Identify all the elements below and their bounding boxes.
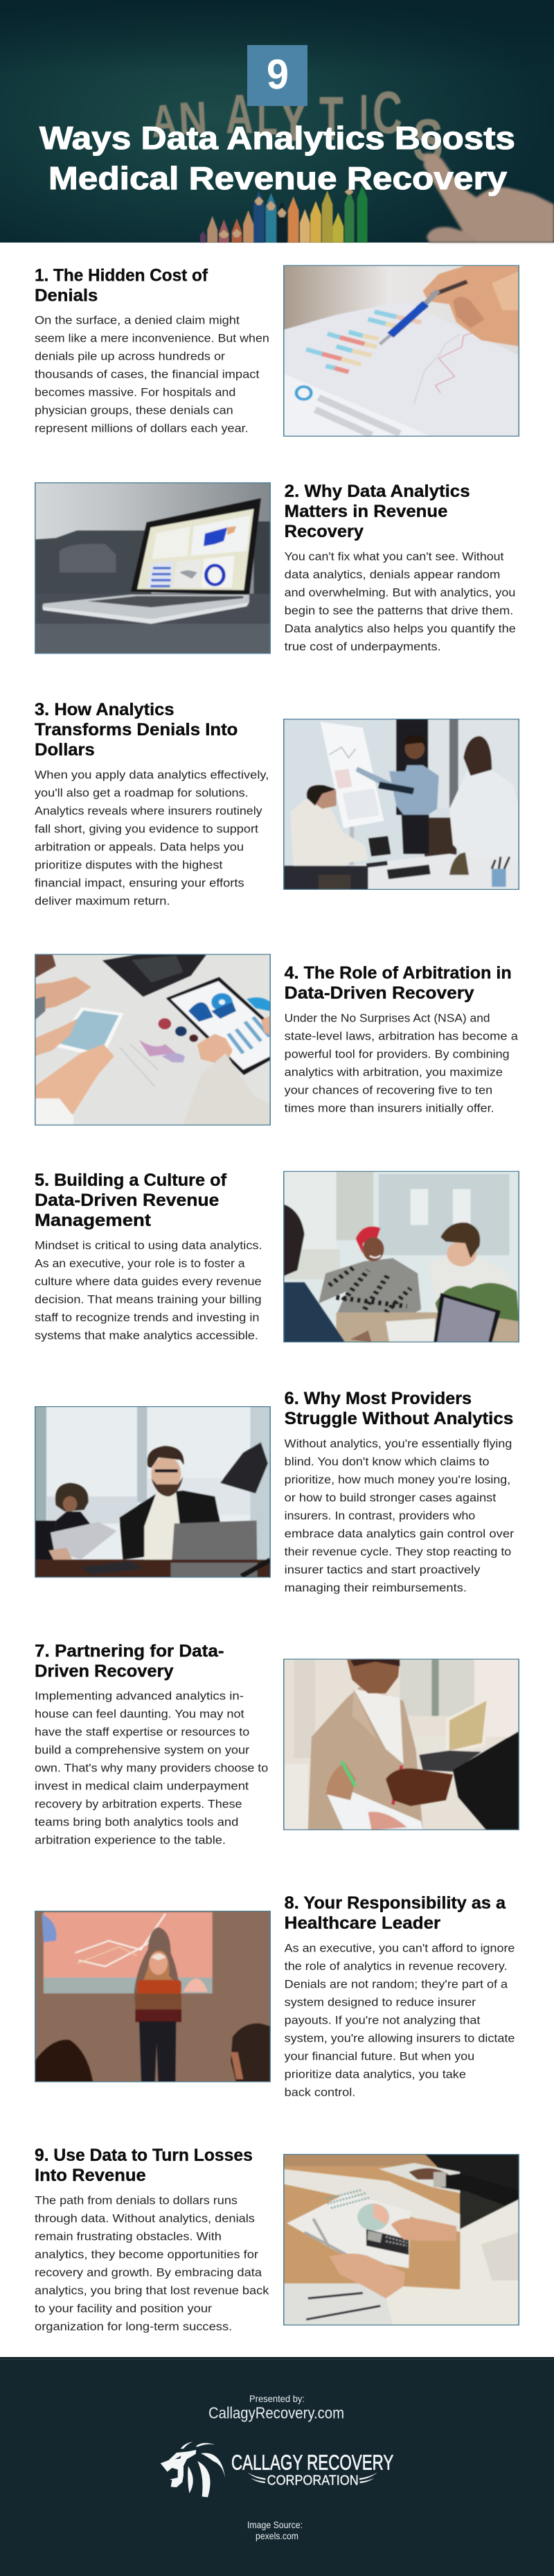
hand pointing xyxy=(424,153,554,243)
analytics letters in background photo: Y xyxy=(279,85,308,154)
photo: speaker in front of projection xyxy=(35,1911,271,2082)
photo: calculator and charts on a wooden table xyxy=(283,2154,519,2326)
number badge: 9 xyxy=(267,51,289,98)
body text 3: fall short, giving you evidence to support xyxy=(35,823,258,836)
photo: hand charting with blue pen xyxy=(283,265,519,437)
section 5 xyxy=(35,1171,519,1342)
body text 9: The path from denials to dollars runs xyxy=(35,2194,238,2207)
body text 5: decision. That means training your billing xyxy=(35,1293,262,1306)
body text 6: managing their reimbursements. xyxy=(285,1581,467,1595)
section 9 xyxy=(35,2146,519,2333)
body text 7: teams bring both analytics tools and xyxy=(35,1815,238,1828)
body text 8: the role of analytics in revenue recovery. xyxy=(285,1959,508,1972)
body text 2: Data analytics also helps you quantify the xyxy=(285,622,516,635)
number badge xyxy=(247,45,307,106)
body text 6: blind. You don't know which claims to xyxy=(285,1455,490,1469)
body text 5: As an executive, your role is to foster a xyxy=(35,1256,245,1270)
body text 7 xyxy=(35,1689,268,1846)
heading 3: Dollars xyxy=(35,740,95,760)
image source xyxy=(247,2519,303,2541)
heading 7: Driven Recovery xyxy=(35,1661,174,1681)
presented by: Presented by: xyxy=(249,2393,305,2404)
body text 1: thousands of cases, the financial impact xyxy=(35,367,260,381)
heading 4: 4. The Role of Arbitration in xyxy=(285,963,512,983)
body text 3: you'll also get a roadmap for solutions. xyxy=(35,787,249,800)
heading 6: Struggle Without Analytics xyxy=(285,1409,513,1428)
body text 5: Mindset is critical to using data analytics. xyxy=(35,1238,262,1252)
analytics letters in background photo: N xyxy=(177,91,208,144)
heading 2 xyxy=(285,482,470,541)
presented by xyxy=(208,2393,344,2421)
body text 1: represent millions of dollars each year. xyxy=(35,421,249,435)
heading 5: 5. Building a Culture of xyxy=(35,1171,227,1190)
body text 8: prioritize data analytics, you take xyxy=(285,2067,466,2080)
body text 6: their revenue cycle. They stop reacting to xyxy=(285,1545,511,1559)
body text 8: payouts. If you're not analyzing that xyxy=(285,2013,481,2026)
presented by: CallagyRecovery.com xyxy=(208,2403,344,2421)
heading 3 xyxy=(35,700,238,760)
icon: wings xyxy=(247,2473,377,2483)
heading 3: Transforms Denials Into xyxy=(35,720,238,739)
logo: Callagy Recovery Corporation: CORPORATION xyxy=(267,2473,359,2489)
body text 6 xyxy=(285,1437,515,1595)
header banner xyxy=(0,0,554,243)
body text 7: build a comprehensive system on your xyxy=(35,1743,250,1756)
analytics letters in background photo: T xyxy=(319,85,343,154)
heading 5 xyxy=(35,1171,227,1230)
body text 7: arbitration experience to the table. xyxy=(35,1833,226,1846)
body text 9: recovery and growth. By embracing data xyxy=(35,2266,262,2279)
body text 9: organization for long-term success. xyxy=(35,2320,232,2333)
section 8 xyxy=(35,1893,515,2099)
body text 8: back control. xyxy=(285,2085,355,2099)
body text 4: your chances of recovering five to ten xyxy=(285,1084,492,1096)
heading 6: 6. Why Most Providers xyxy=(285,1389,472,1408)
section 2 xyxy=(35,482,516,654)
back person xyxy=(449,770,519,869)
heading 2: Matters in Revenue xyxy=(285,502,447,521)
heading 1: Denials xyxy=(35,286,98,305)
analytics letters in background photo xyxy=(150,80,443,174)
heading 6 xyxy=(285,1389,513,1428)
photo: laptop with dashboards xyxy=(35,482,271,654)
body text 6: insurers. In contrast, providers who xyxy=(285,1509,475,1523)
body text 2: and overwhelming. But with analytics, you xyxy=(285,586,515,599)
body text 3: When you apply data analytics effectively, xyxy=(35,769,269,782)
pencils xyxy=(200,185,368,243)
section 4 xyxy=(35,954,518,1125)
heading 1 xyxy=(35,266,208,305)
body text 2: true cost of underpayments. xyxy=(285,640,441,653)
seated man xyxy=(290,798,368,875)
body text 9: remain frustrating obstacles. With xyxy=(35,2230,222,2243)
heading 2: Recovery xyxy=(285,522,364,541)
photo: businessman with laptop and papers xyxy=(35,1406,271,1577)
body text 3: arbitration or appeals. Data helps you xyxy=(35,841,244,854)
body text 4: analytics with arbitration, you maximize xyxy=(285,1066,503,1078)
body text 1: denials pile up across hundreds or xyxy=(35,349,225,363)
title: Ways Data Analytics Boosts xyxy=(39,120,515,156)
body text 7: recovery by arbitration experts. These xyxy=(35,1797,242,1810)
body text 7: own. That's why many providers choose to xyxy=(35,1761,268,1774)
analytics letters in background photo: A xyxy=(150,94,179,147)
analytics letters in background photo: S xyxy=(413,107,443,174)
heading 8: Healthcare Leader xyxy=(285,1913,440,1933)
photo: presenter at flipchart xyxy=(283,719,519,890)
heading 8 xyxy=(285,1893,506,1933)
body text 7: house can feel daunting. You may not xyxy=(35,1707,244,1720)
analytics letters in background photo: A xyxy=(226,83,253,145)
body text 5 xyxy=(35,1238,262,1342)
logo: Callagy Recovery Corporation xyxy=(161,2442,393,2497)
heading 9: 9. Use Data to Turn Losses xyxy=(35,2146,253,2165)
body text 8: Denials are not random; they're part of a xyxy=(285,1977,508,1990)
photo: woman in tan blazer reviewing report xyxy=(283,1658,519,1830)
heading 4: Data-Driven Recovery xyxy=(285,983,474,1003)
body text 5: systems that make analytics accessible. xyxy=(35,1329,258,1342)
body text 1 xyxy=(35,313,269,435)
body text 2: begin to see the patterns that drive them. xyxy=(285,604,513,617)
analytics letters in background photo: I xyxy=(359,85,368,141)
heading 7 xyxy=(35,1641,224,1681)
image source: pexels.com xyxy=(256,2530,298,2541)
body text 5: staff to recognize trends and investing in xyxy=(35,1311,259,1324)
heading 4 xyxy=(285,963,512,1003)
heading 3: 3. How Analytics xyxy=(35,700,175,719)
photo: team reviewing charts on a white desk xyxy=(35,954,271,1125)
body text 2: data analytics, denials appear random xyxy=(285,568,500,581)
body text 8: As an executive, you can't afford to ignore xyxy=(285,1941,515,1954)
title: Medical Revenue Recovery xyxy=(48,160,507,196)
body text 1: On the surface, a denied claim might xyxy=(35,313,240,327)
heading 2: 2. Why Data Analytics xyxy=(285,482,470,501)
body text 2 xyxy=(285,550,516,653)
body text 9 xyxy=(35,2194,269,2333)
section 3 xyxy=(35,700,519,908)
body text 9: analytics, you bring that lost revenue back xyxy=(35,2284,269,2297)
body text 1: physician groups, these denials can xyxy=(35,403,233,417)
section 6 xyxy=(35,1389,515,1595)
body text 4: powerful tool for providers. By combining xyxy=(285,1048,510,1060)
body text 7: invest in medical claim underpayment xyxy=(35,1779,249,1792)
heading 9: Into Revenue xyxy=(35,2166,146,2185)
section 7 xyxy=(35,1641,519,1846)
heading 8: 8. Your Responsibility as a xyxy=(285,1893,506,1913)
body text 4: state-level laws, arbitration has become a xyxy=(285,1030,518,1042)
analytics letters in background photo: L xyxy=(257,88,278,146)
presenter xyxy=(389,765,439,851)
body text 9: to your facility and position your xyxy=(35,2302,212,2315)
heading 5: Data-Driven Revenue xyxy=(35,1191,219,1210)
body text 4: times more than insurers initially offer. xyxy=(285,1102,494,1114)
body text 3: financial impact, ensuring your efforts xyxy=(35,877,244,890)
body text 8: your financial future. But when you xyxy=(285,2049,474,2062)
body text 8 xyxy=(285,1941,515,2099)
heading 5: Management xyxy=(35,1211,152,1230)
body text 3: prioritize disputes with the highest xyxy=(35,859,223,872)
photo: three colleagues at a meeting table xyxy=(283,1171,519,1342)
image source: Image Source: xyxy=(247,2519,303,2530)
body text 3: deliver maximum return. xyxy=(35,895,170,908)
body text 6: Without analytics, you're essentially flying xyxy=(285,1437,512,1451)
body text 2: You can't fix what you can't see. Without xyxy=(285,550,504,563)
heading 1: 1. The Hidden Cost of xyxy=(35,266,208,286)
title xyxy=(39,120,515,196)
heading 7: 7. Partnering for Data- xyxy=(35,1641,224,1661)
body text 8: system, you're allowing insurers to dictate xyxy=(285,2031,515,2044)
body text 1: becomes massive. For hospitals and xyxy=(35,385,235,399)
body text 6: prioritize, how much money you're losing, xyxy=(285,1473,510,1487)
table xyxy=(345,854,519,890)
section 1 xyxy=(35,265,519,437)
body text 4: Under the No Surprises Act (NSA) and xyxy=(285,1012,490,1024)
body text 8: system designed to reduce insurer xyxy=(285,1995,476,2008)
body text 6: or how to build stronger cases against xyxy=(285,1491,497,1505)
body text 1: seem like a mere inconvenience. But when xyxy=(35,331,269,345)
analytics letters in background photo: C xyxy=(373,80,402,146)
heading 9 xyxy=(35,2146,253,2185)
body text 9: through data. Without analytics, denials xyxy=(35,2212,255,2225)
body text 7: have the staff expertise or resources to xyxy=(35,1725,249,1738)
body text 5: culture where data guides every revenue xyxy=(35,1274,262,1288)
footer xyxy=(0,2357,554,2576)
body text 3: Analytics reveals where insurers routinely xyxy=(35,805,262,818)
body text 6: insurer tactics and start proactively xyxy=(285,1563,481,1577)
body text 9: analytics, they become opportunities for xyxy=(35,2248,258,2261)
icon: lion head xyxy=(161,2442,225,2497)
body text 6: embrace data analytics gain control over xyxy=(285,1527,515,1541)
body text 4 xyxy=(285,1012,518,1114)
body text 3 xyxy=(35,769,269,908)
body text 7: Implementing advanced analytics in- xyxy=(35,1689,244,1702)
